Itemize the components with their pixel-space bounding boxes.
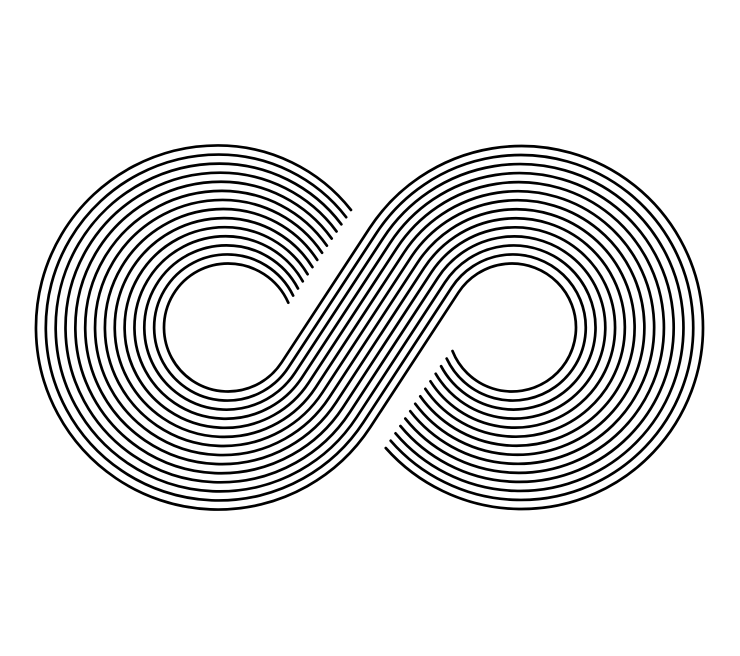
- icon: infinity symbol made of 14 concentric lines: [36, 145, 703, 510]
